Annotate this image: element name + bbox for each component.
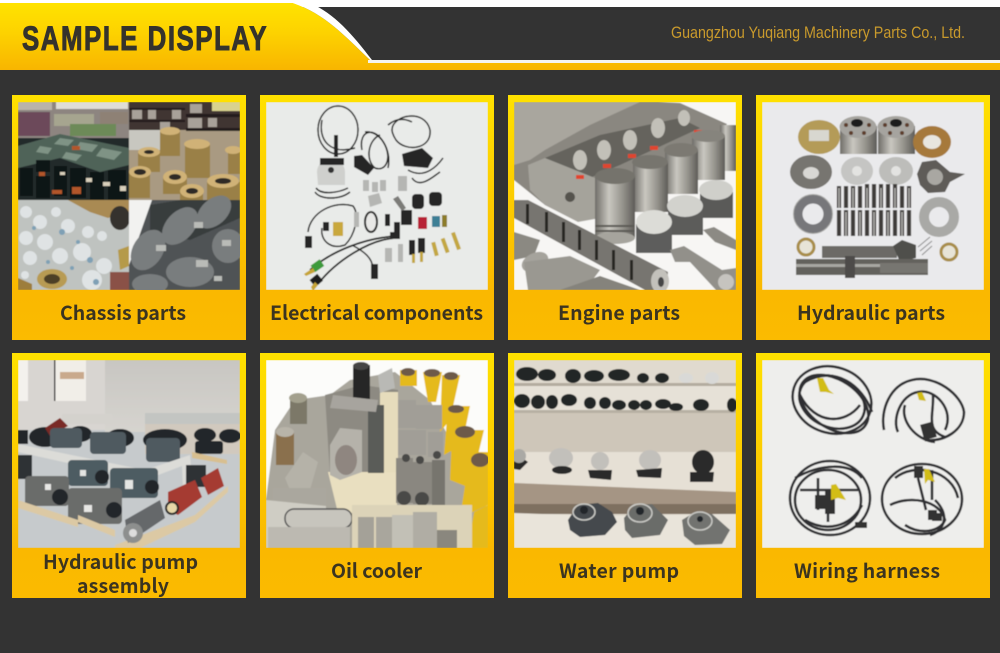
photo: oil cooler xyxy=(266,360,488,548)
photo: engine parts xyxy=(514,102,736,290)
photo: wiring harness xyxy=(762,360,984,548)
label: oil cooler: Oil cooler xyxy=(331,555,422,584)
label: engine parts: Engine parts xyxy=(558,297,680,326)
header banner xyxy=(0,0,1000,70)
card: hydraulic parts xyxy=(756,95,990,340)
photo: hydraulic parts xyxy=(762,102,984,290)
card: hydraulic pump assembly xyxy=(12,353,246,599)
label: hydraulic parts: Hydraulic parts xyxy=(797,297,945,326)
label: water pump: Water pump xyxy=(559,555,679,584)
card: oil cooler xyxy=(260,353,494,598)
label: hydraulic pump assembly xyxy=(43,546,198,599)
label: electrical components: Electrical components xyxy=(270,297,483,326)
card: engine parts xyxy=(508,95,742,340)
card: water pump xyxy=(508,353,742,598)
photo: chassis parts xyxy=(18,102,240,290)
title: SAMPLE DISPLAY xyxy=(22,20,268,58)
label: hydraulic pump assembly: Hydraulic pump xyxy=(43,546,198,575)
label: chassis parts: Chassis parts xyxy=(60,297,186,326)
card: electrical components xyxy=(260,95,494,340)
photo: water pump xyxy=(514,360,736,548)
photo: electrical components xyxy=(266,102,488,290)
card: wiring harness xyxy=(756,353,990,598)
label: hydraulic pump assembly: assembly xyxy=(77,570,169,599)
photo: hydraulic pump assembly xyxy=(18,360,240,548)
label: wiring harness: Wiring harness xyxy=(794,555,940,584)
card: chassis parts xyxy=(12,95,246,340)
